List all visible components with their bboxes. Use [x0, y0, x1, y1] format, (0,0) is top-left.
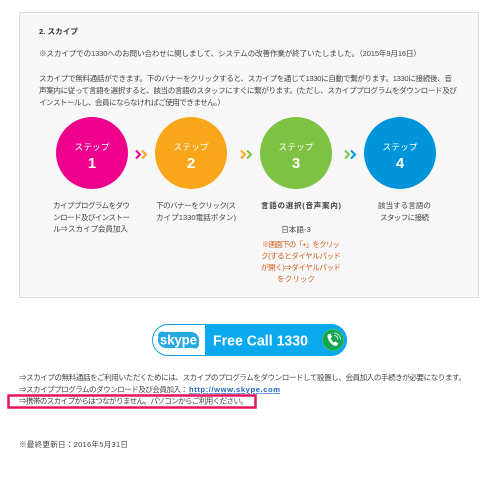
step 3 orange note: をクリック	[277, 274, 315, 284]
note line 2 with link	[19, 384, 280, 394]
note line 1: ⇒スカイプの無料通話をご利用いただくためには、スカイプのプログラムをダウンロードして設置し、会員加入の手続きが必要になります。	[19, 372, 466, 382]
skype logo: skype	[160, 332, 197, 348]
step 3 caption	[261, 200, 341, 234]
panel: skype steps	[20, 12, 478, 298]
step 1 caption: ル⇒スカイプ会員加入	[53, 224, 128, 234]
step 3 circle: 3	[292, 155, 300, 172]
step 1 caption	[53, 200, 130, 234]
step 3 orange note: が開く)⇒ダイヤルパッド	[261, 262, 341, 272]
phone icon	[322, 330, 344, 350]
step 2 circle	[155, 117, 227, 189]
heading: 2. スカイプ	[39, 27, 78, 36]
last updated: ※最終更新日：2016年5月31日	[19, 439, 128, 449]
description text: 声案内に従って言語を選択すると、該当の言語のスタッフにすぐに繋がります。(ただし、スカイププログラムをダウンロード及び	[39, 85, 457, 95]
note line 2 with link: http://www.skype.com	[189, 385, 280, 394]
step 2 caption: カイプ1330電話ボタン)	[156, 212, 236, 222]
step 3 caption: 言語の選択(音声案内)	[261, 200, 341, 210]
step 4 circle: 4	[396, 155, 405, 172]
step 2 circle: 2	[187, 155, 195, 172]
highlighted warning: ⇒携帯のスカイプからはつながりません。パソコンからご利用ください。	[19, 396, 248, 406]
step 4 circle	[364, 117, 436, 189]
step 4 circle: ステップ	[382, 142, 418, 152]
step 2 caption	[156, 201, 236, 222]
arrow 3 to 4	[345, 150, 355, 158]
step 3 circle	[260, 117, 332, 189]
step 4 caption: 該当する言語の	[378, 200, 431, 210]
skype free call button: Free Call 1330	[213, 334, 308, 350]
step 2 circle: ステップ	[173, 142, 209, 152]
step 3 orange note: ※画面下の「+」をクリッ	[262, 240, 340, 249]
highlighted warning	[8, 396, 256, 408]
notice text: ※スカイプでの1330へのお問い合わせに関しまして、システムの改善作業が終了いたしました。（2015年9月16日）	[39, 48, 421, 58]
step 4 caption: スタッフに接続	[380, 212, 429, 222]
step 4 caption	[378, 200, 431, 222]
step 2 caption: 下のバナーをクリック(ス	[156, 201, 236, 210]
step 1 circle: 1	[88, 155, 96, 172]
step 1 circle	[56, 117, 128, 189]
skype free call button	[152, 324, 347, 356]
step 3 orange note: ク(するとダイヤルパッド	[261, 250, 341, 260]
description text: スカイプで無料通話ができます。下のバナーをクリックすると、スカイプを通じて1330に自動で繋がります。1330に接続後、音	[39, 73, 452, 83]
description text: インストールし、会員にならなければご使用できません。）	[39, 97, 225, 107]
step 1 caption: カイププログラムをダウ	[53, 200, 130, 210]
step 1 caption: ンロード及びインストー	[53, 213, 130, 222]
step 1 circle: ステップ	[74, 142, 110, 152]
arrow 2 to 3	[241, 150, 251, 158]
step 3 orange note	[261, 240, 341, 284]
step 3 caption: 日本語-3	[281, 224, 311, 234]
note line 2 with link: ⇒スカイププログラムのダウンロード及び会員加入：	[19, 384, 188, 394]
description text	[39, 73, 457, 107]
arrow 1 to 2	[136, 150, 146, 158]
step 3 circle: ステップ	[278, 142, 314, 152]
